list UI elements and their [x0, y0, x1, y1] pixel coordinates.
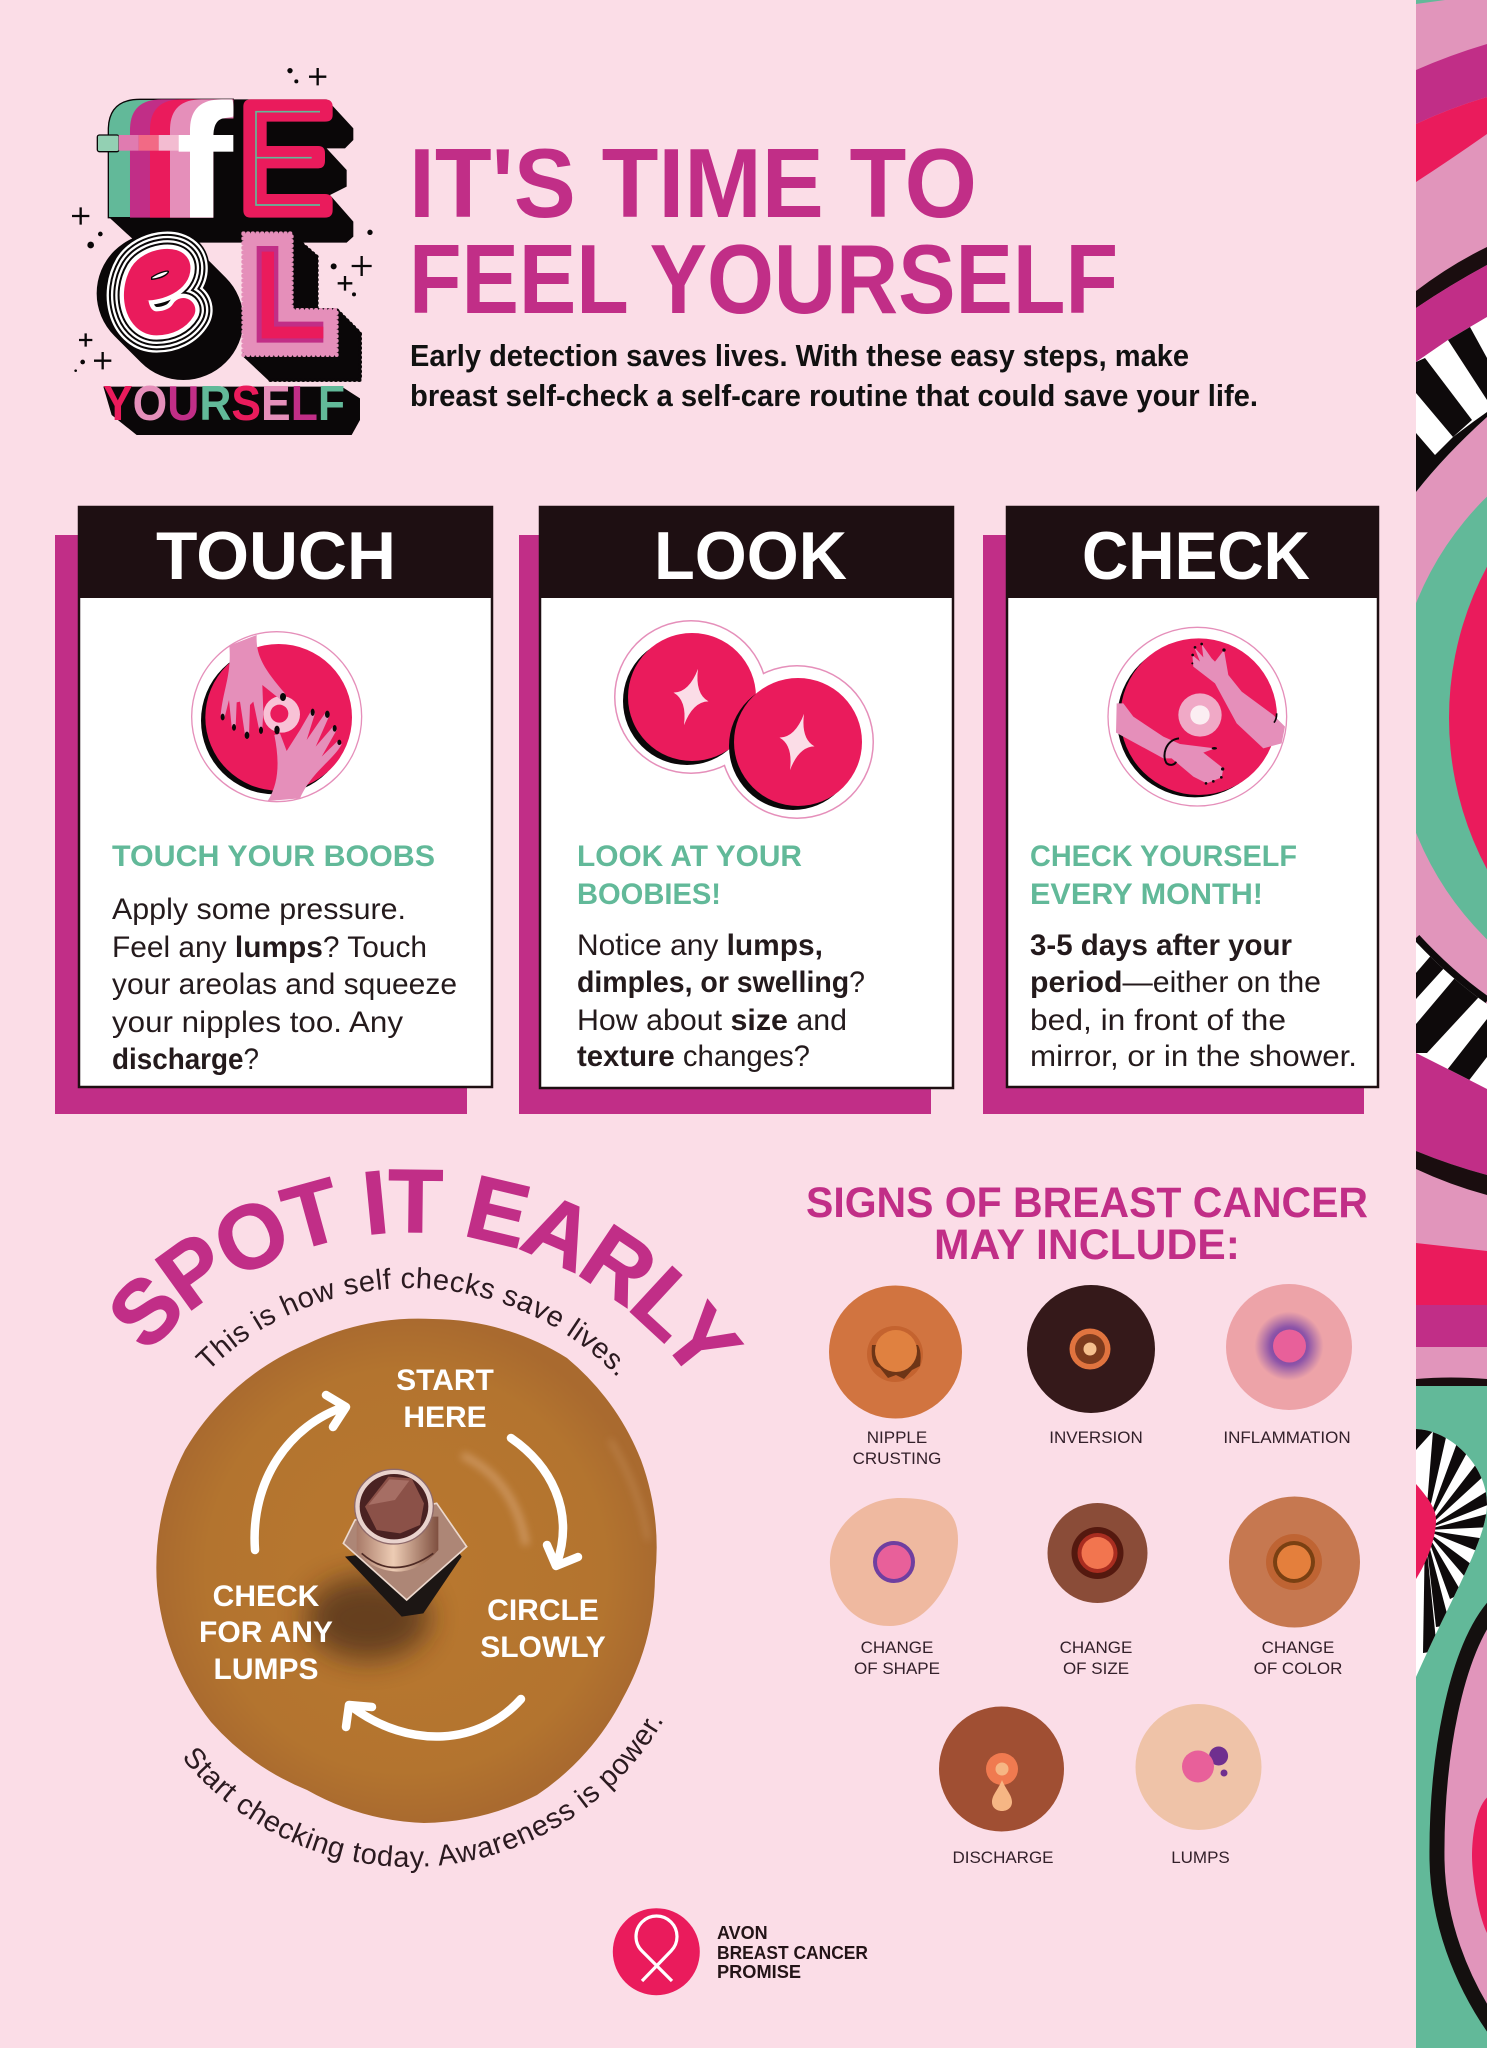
- footer text: [717, 1923, 868, 1982]
- subheading: look: BOOBIES!: [577, 878, 721, 911]
- letter f: [97, 99, 233, 218]
- step: circle slowly: SLOWLY: [480, 1631, 606, 1664]
- lipstick: [343, 1469, 467, 1617]
- text: touch: your nipples too. Any: [112, 1006, 403, 1039]
- footer text: AVON: [717, 1923, 768, 1943]
- icon: hands on breast: [192, 632, 362, 802]
- sign: discharge: DISCHARGE: [952, 1848, 1054, 1867]
- subheading: check: CHECK YOURSELF: [1030, 840, 1297, 873]
- step: circle slowly: [480, 1594, 606, 1664]
- letter E: [243, 99, 333, 218]
- intro text: [410, 338, 1258, 413]
- sign: inflammation: [1223, 1284, 1352, 1447]
- intro text: breast self-check a self-care routine that could save your life.: [410, 378, 1258, 413]
- text: check: period—either on the: [1030, 966, 1321, 999]
- arrow: to check: [346, 1699, 521, 1737]
- step: check for lumps: CHECK: [213, 1580, 320, 1613]
- heading: signs: MAY INCLUDE:: [934, 1221, 1240, 1269]
- arrow: to start: [255, 1395, 346, 1550]
- panel: check: [983, 506, 1379, 1114]
- letter e: [136, 261, 183, 323]
- sign: change of size: OF SIZE: [1063, 1659, 1129, 1678]
- step: start here: [396, 1364, 494, 1434]
- sign: lumps: LUMPS: [1171, 1848, 1230, 1867]
- subheading: check: [1030, 840, 1297, 911]
- text: touch: discharge?: [112, 1043, 259, 1076]
- sparkles: [72, 68, 372, 369]
- text: look: texture changes?: [577, 1040, 810, 1073]
- sign: change of shape: CHANGE: [861, 1638, 933, 1657]
- logo: feel yourself: [72, 68, 373, 435]
- footer text: PROMISE: [717, 1962, 801, 1982]
- heading: look: LOOK: [654, 518, 847, 594]
- text: look: dimples, or swelling?: [577, 966, 865, 999]
- step: check for lumps: FOR ANY: [199, 1616, 333, 1649]
- sign: change of shape: OF SHAPE: [854, 1659, 940, 1678]
- step: check for lumps: LUMPS: [214, 1653, 318, 1686]
- sign: inversion: [1027, 1285, 1155, 1447]
- step: check for lumps: [199, 1580, 333, 1686]
- heading: spot it early: SPOT IT EARLY: [112, 1169, 744, 1366]
- text: look: How about size and: [577, 1004, 847, 1037]
- heading: touch: TOUCH: [156, 518, 396, 594]
- subheading: look: [577, 840, 802, 911]
- text: look: [577, 929, 865, 1073]
- sign: inflammation: INFLAMMATION: [1223, 1428, 1351, 1447]
- step: start here: START: [396, 1364, 494, 1397]
- arc text: start checking: Start checking today. Awareness is power.: [184, 1718, 663, 1873]
- text: check: 3-5 days after your: [1030, 929, 1292, 962]
- arc text: this is how: This is how self checks save lives.: [194, 1267, 620, 1376]
- foundation blob with cycle: [156, 1319, 657, 1823]
- sign: change of color: OF COLOR: [1254, 1659, 1342, 1678]
- intro text: Early detection saves lives. With these easy steps, make: [410, 338, 1189, 373]
- footer text: BREAST CANCER: [717, 1943, 868, 1963]
- sign: change of size: [1048, 1503, 1148, 1678]
- text: check: [1030, 929, 1357, 1073]
- text: touch: your areolas and squeeze: [112, 968, 457, 1001]
- subheading: touch: TOUCH YOUR BOOBS: [112, 840, 435, 873]
- title: [409, 128, 1118, 334]
- sign: change of size: CHANGE: [1060, 1638, 1132, 1657]
- heading: signs: SIGNS OF BREAST CANCER: [806, 1179, 1368, 1227]
- panel: look: [519, 506, 954, 1114]
- panel: touch: [55, 506, 493, 1114]
- text: touch: Apply some pressure.: [112, 893, 406, 926]
- sign: nipple crusting: CRUSTING: [853, 1449, 941, 1468]
- sign: lumps: [1136, 1704, 1262, 1867]
- text: check: mirror, or in the shower.: [1030, 1040, 1357, 1073]
- title: IT'S TIME TO: [409, 128, 977, 238]
- heading: check: CHECK: [1082, 518, 1310, 594]
- title: FEEL YOURSELF: [409, 224, 1118, 334]
- sign: discharge: [939, 1706, 1064, 1867]
- subheading: check: EVERY MONTH!: [1030, 878, 1263, 911]
- text: look: Notice any lumps,: [577, 929, 823, 962]
- heading: signs: [806, 1179, 1368, 1269]
- sign: nipple crusting: NIPPLE: [867, 1428, 927, 1447]
- subheading: look: LOOK AT YOUR: [577, 840, 802, 873]
- sign: inversion: INVERSION: [1049, 1428, 1143, 1447]
- step: start here: HERE: [403, 1401, 487, 1434]
- icon: arms around breast: [1108, 627, 1287, 806]
- text: touch: [112, 893, 457, 1076]
- letter L: [243, 233, 337, 355]
- text: check: bed, in front of the: [1030, 1004, 1286, 1037]
- sign: nipple crusting: [829, 1286, 962, 1468]
- logo word: YOURSELF: YOURSELF: [103, 377, 345, 431]
- icon: two breasts with sparkles: [614, 620, 874, 819]
- sign: change of color: CHANGE: [1262, 1638, 1334, 1657]
- step: circle slowly: CIRCLE: [487, 1594, 599, 1627]
- decorative right strip: [1416, 0, 1487, 2048]
- text: touch: Feel any lumps? Touch: [112, 931, 427, 964]
- sign: change of shape: [830, 1498, 958, 1678]
- sign: change of color: [1229, 1496, 1360, 1678]
- arrow: to circle: [511, 1438, 578, 1566]
- footer logo: ribbon: [613, 1908, 700, 1995]
